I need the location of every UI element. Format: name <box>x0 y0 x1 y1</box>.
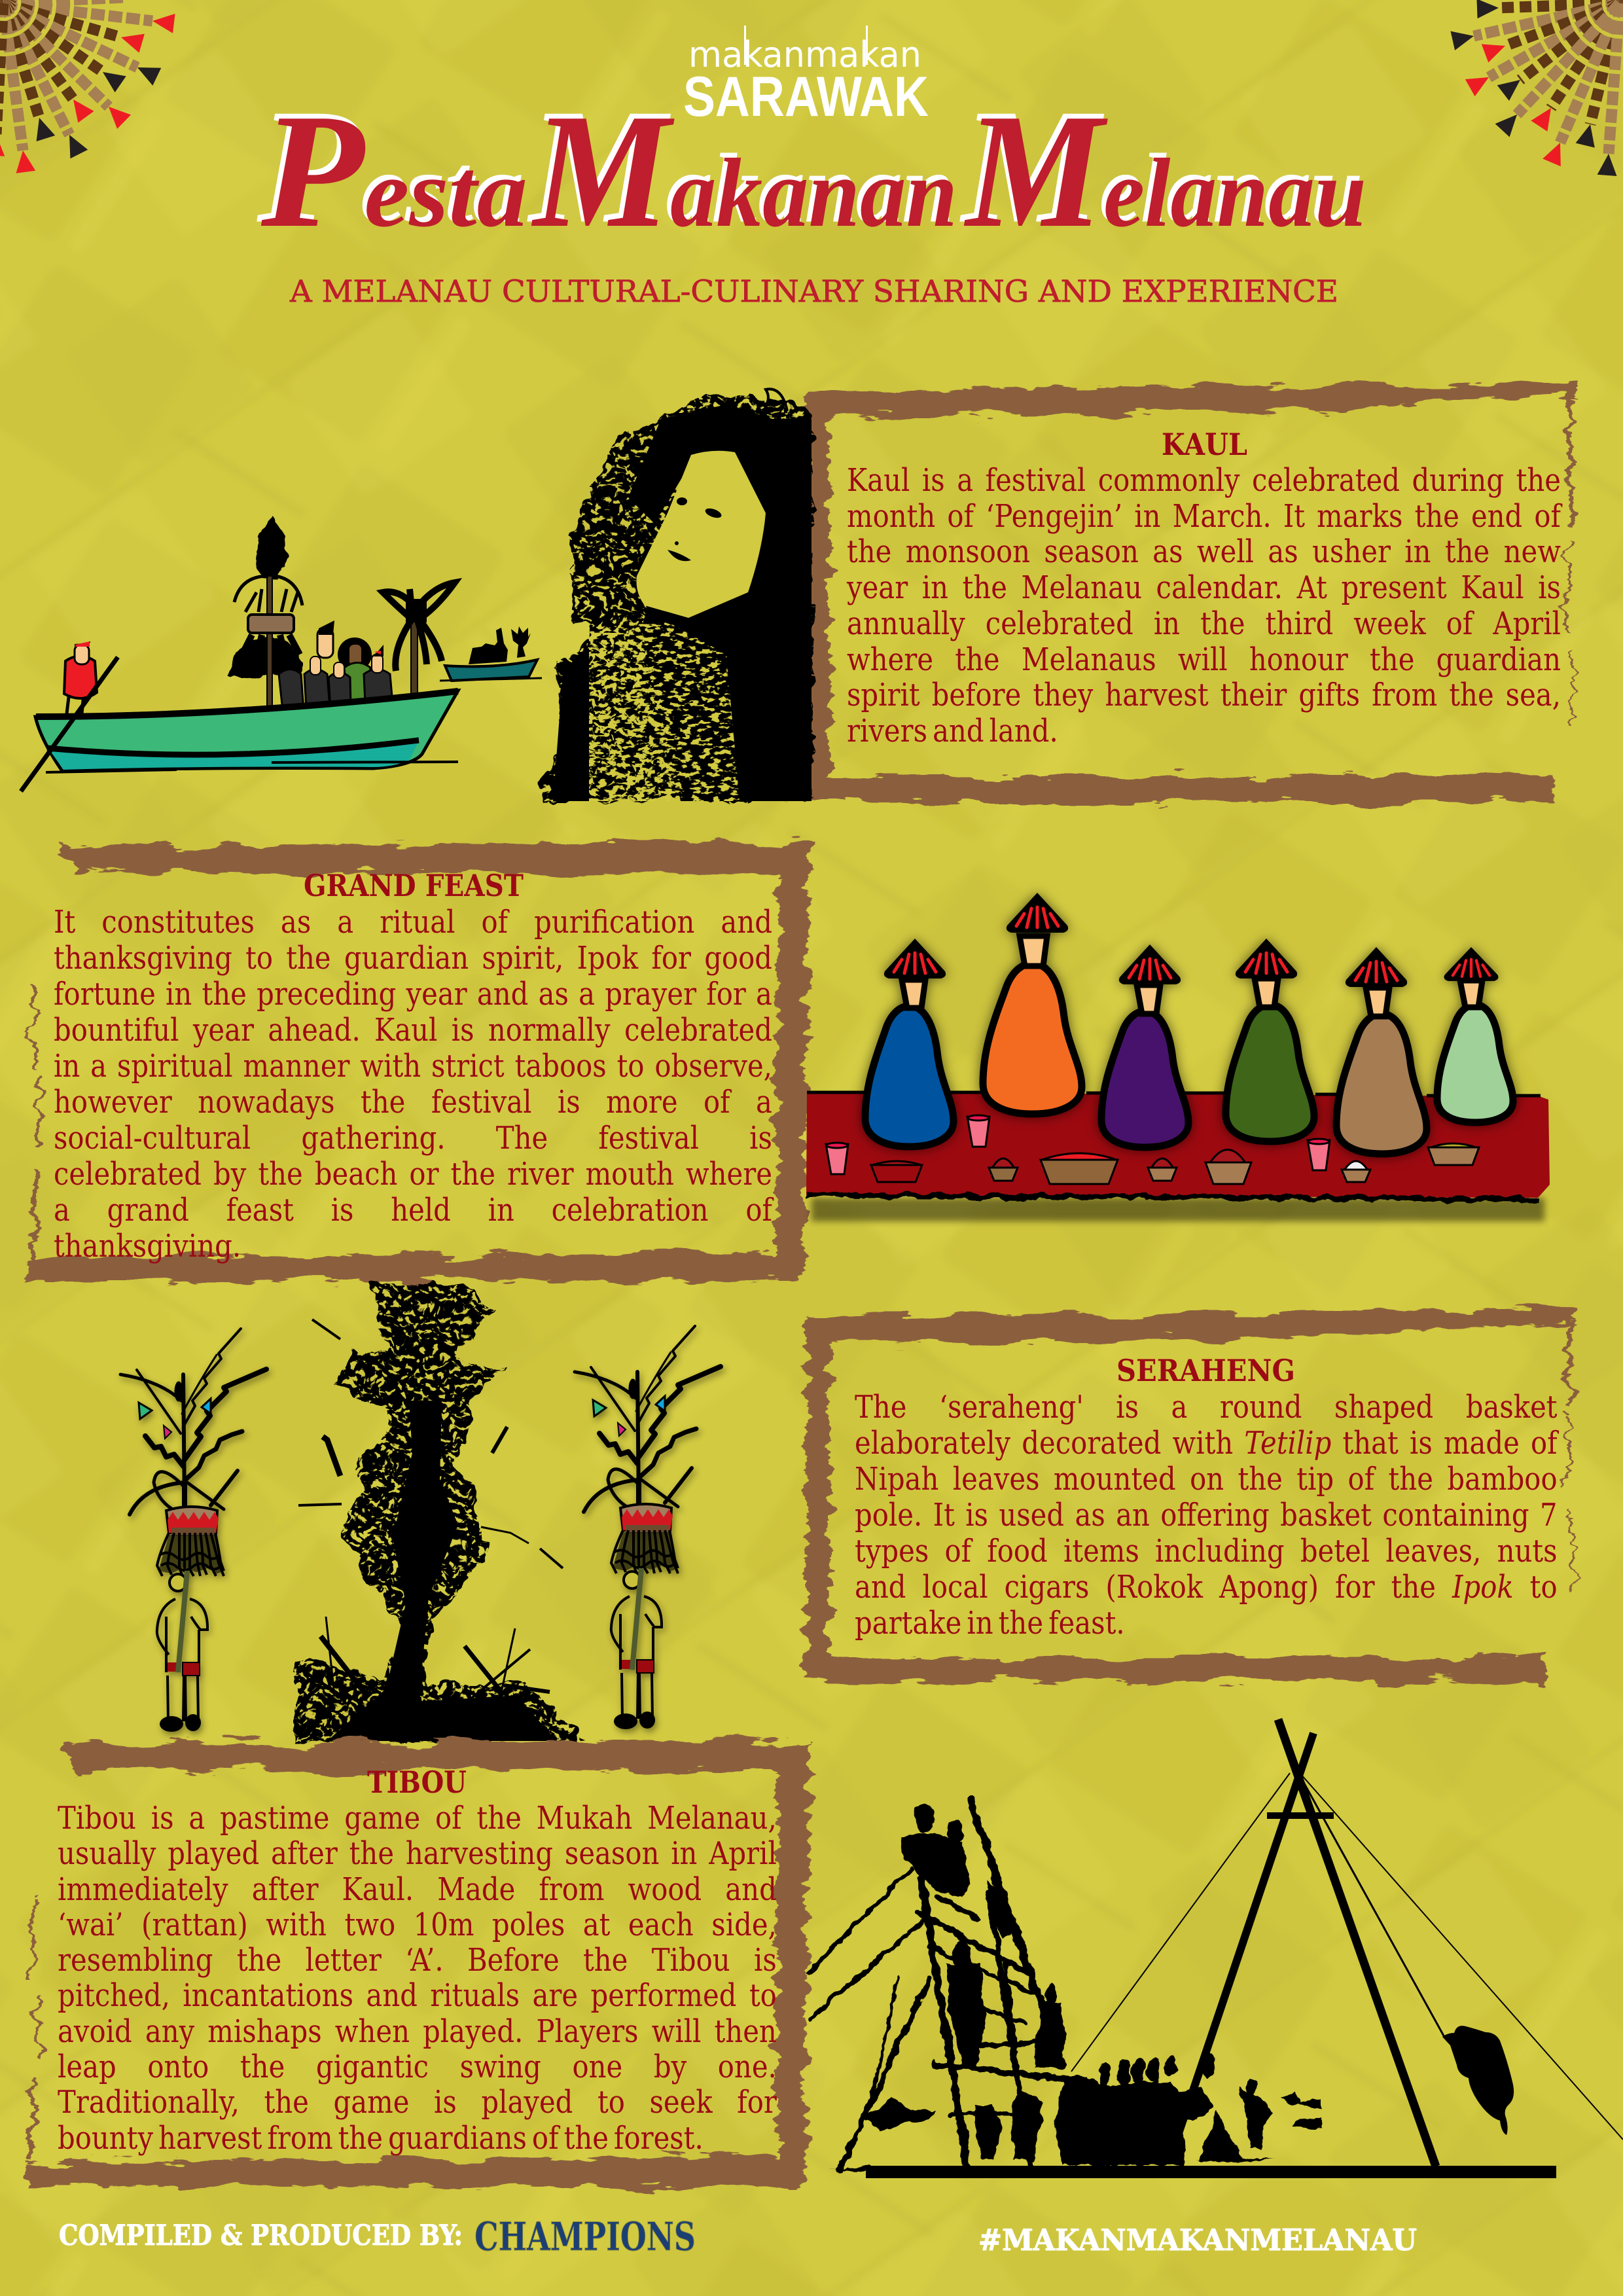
footer logo: Champions: CHAMPIONS <box>474 2214 696 2260</box>
text block: Grand Feast: however nowadays the festival is more of a <box>54 1084 772 1121</box>
text block: Kaul: rivers and land. <box>847 713 1058 749</box>
text block: Seraheng: pole. It is used as an offering basket containing 7 <box>855 1497 1558 1534</box>
title: Makanan <box>531 81 957 262</box>
figure 3: purple <box>1101 944 1188 1147</box>
text block: Kaul: month of ‘Pengejin’ in March. It marks the end of <box>847 498 1561 535</box>
text block: Grand Feast: thanksgiving. <box>54 1228 241 1265</box>
food bowls <box>871 1143 1479 1184</box>
text block: Tibou: bounty harvest from the guardians of the forest. <box>58 2120 704 2157</box>
illustration: Melanau woman silhouette <box>541 389 812 801</box>
text block: Grand Feast: thanksgiving to the guardian spirit, Ipok for good <box>54 940 772 977</box>
passengers <box>279 620 393 711</box>
text block: Seraheng: and local cigars (Rokok Apong) for the Ipok to <box>855 1569 1558 1605</box>
main hull <box>35 691 458 771</box>
climbers on tower <box>900 1804 1065 2160</box>
title: Melanau <box>959 76 1363 257</box>
figure 4: green <box>1226 939 1314 1141</box>
illustration: left seraheng bearer <box>120 1329 266 1732</box>
footer credit: COMPILED & PRODUCED BY: <box>59 2219 463 2252</box>
illustration: boats with Kaul procession <box>21 517 542 791</box>
figure 5: brown <box>1336 947 1427 1154</box>
text block: Tibou: leap onto the gigantic swing one by one. <box>58 2049 777 2085</box>
text block: Kaul: year in the Melanau calendar. At present Kaul is <box>847 569 1561 606</box>
red table cloth <box>806 1092 1550 1198</box>
illustration: central charred ceremonial tree <box>295 1284 584 1743</box>
text block: Tibou: ‘wai’ (rattan) with two 10m poles at each side, <box>58 1907 777 1943</box>
text block: Tibou <box>58 1800 777 2157</box>
text block: Grand Feast: a grand feast is held in celebration of <box>54 1192 772 1229</box>
subtitle: A MELANAU CULTURAL-CULINARY SHARING AND EXPERIENCE <box>289 274 1338 309</box>
logo: makanmakan Sarawak <box>683 26 929 128</box>
text block: Grand Feast: in a spiritual manner with strict taboos to observe, <box>54 1048 772 1085</box>
text block: Seraheng: elaborately decorated with Tetilip that is made of <box>855 1425 1558 1462</box>
text block: Seraheng: types of food items including betel leaves, nuts <box>855 1533 1558 1570</box>
icon: top-right woven corner ornament <box>1474 0 1623 154</box>
crowd at base <box>828 2053 1322 2174</box>
text block: Kaul: Kaul is a festival commonly celebrated during the <box>847 462 1561 499</box>
heading: Kaul: KAUL <box>1162 427 1247 462</box>
heading: Seraheng: SERAHENG <box>1116 1353 1295 1388</box>
title: Makanan <box>527 76 954 257</box>
table shadow <box>812 1198 1544 1221</box>
ground bar <box>866 2166 1556 2178</box>
text block: Kaul: annually celebrated in the third week of April <box>847 605 1561 642</box>
title: Melanau <box>963 81 1366 262</box>
text block: Kaul: spirit before they harvest their gifts from the sea, <box>847 677 1561 713</box>
text block: Tibou: immediately after Kaul. Made from wood and <box>58 1871 777 1908</box>
logo: makanmakan Sarawak: SARAWAK <box>683 65 929 128</box>
panel: Grand Feast frame <box>29 842 809 1282</box>
text block: Seraheng: Nipah leaves mounted on the tip of the bamboo <box>855 1461 1558 1498</box>
swing A-frame <box>1071 1719 1623 2166</box>
heading: Tibou: TIBOU <box>367 1765 467 1800</box>
figure 6: pale green <box>1437 947 1513 1122</box>
title <box>257 76 1366 262</box>
text block: Grand Feast <box>54 904 774 1265</box>
text block: Grand Feast: celebrated by the beach or the river mouth where <box>54 1156 772 1193</box>
drink cups <box>826 1115 1330 1174</box>
text block: Tibou: resembling the letter ‘A’. Before the Tibou is <box>58 1942 777 1979</box>
text block: Seraheng: The ‘seraheng' is a round shaped basket <box>855 1389 1558 1426</box>
text block: Tibou: pitched, incantations and rituals are performed to <box>58 1977 777 2014</box>
illustration: grand feast table with six figures <box>806 893 1550 1221</box>
panel: Kaul frame <box>805 382 1577 802</box>
swinging player <box>1442 2026 1514 2135</box>
panel: Seraheng frame <box>805 1309 1576 1682</box>
panel: Tibou frame <box>29 1740 809 2187</box>
text block: Seraheng: partake in the feast. <box>855 1605 1125 1641</box>
text block: Grand Feast: social-cultural gathering. The festival is <box>54 1120 772 1157</box>
text block: Grand Feast: It constitutes as a ritual of purification and <box>54 904 772 941</box>
text block: Grand Feast: bountiful year ahead. Kaul is normally celebrated <box>54 1012 772 1049</box>
tall seraheng pole <box>229 517 302 710</box>
heading: Grand Feast: GRAND FEAST <box>304 868 524 903</box>
title: Pesta <box>260 81 527 262</box>
figure 2: orange <box>983 893 1082 1114</box>
text block: Tibou: usually played after the harvesting season in April <box>58 1835 777 1872</box>
logo: makanmakan Sarawak: makanmakan <box>688 34 921 75</box>
text block: Kaul <box>847 462 1563 749</box>
small distant boat <box>440 626 542 681</box>
palm <box>383 583 455 700</box>
footer hashtag: #MAKANMAKANMELANAU <box>978 2223 1417 2257</box>
illustration: right seraheng bearer <box>575 1326 721 1729</box>
icon: top-left woven corner ornament <box>0 0 152 151</box>
text block: Tibou: Tibou is a pastime game of the Mukah Melanau, <box>58 1800 777 1837</box>
title: Pesta <box>257 76 524 257</box>
tower poles and rungs <box>810 1800 1069 2171</box>
text block: Grand Feast: fortune in the preceding year and as a prayer for a <box>54 976 772 1013</box>
text block: Tibou: Traditionally, the game is played to seek for <box>58 2084 777 2121</box>
text block: Tibou: avoid any mishaps when played. Players will then <box>58 2013 777 2050</box>
figure 1: blue <box>865 939 954 1147</box>
text block: Seraheng <box>855 1389 1559 1641</box>
illustration: Tibou swing and climbing tower <box>810 1719 1623 2178</box>
text block: Kaul: where the Melanaus will honour the guardian <box>847 641 1561 678</box>
text block: Kaul: the monsoon season as well as usher in the new <box>847 533 1561 570</box>
boatman <box>21 641 118 791</box>
